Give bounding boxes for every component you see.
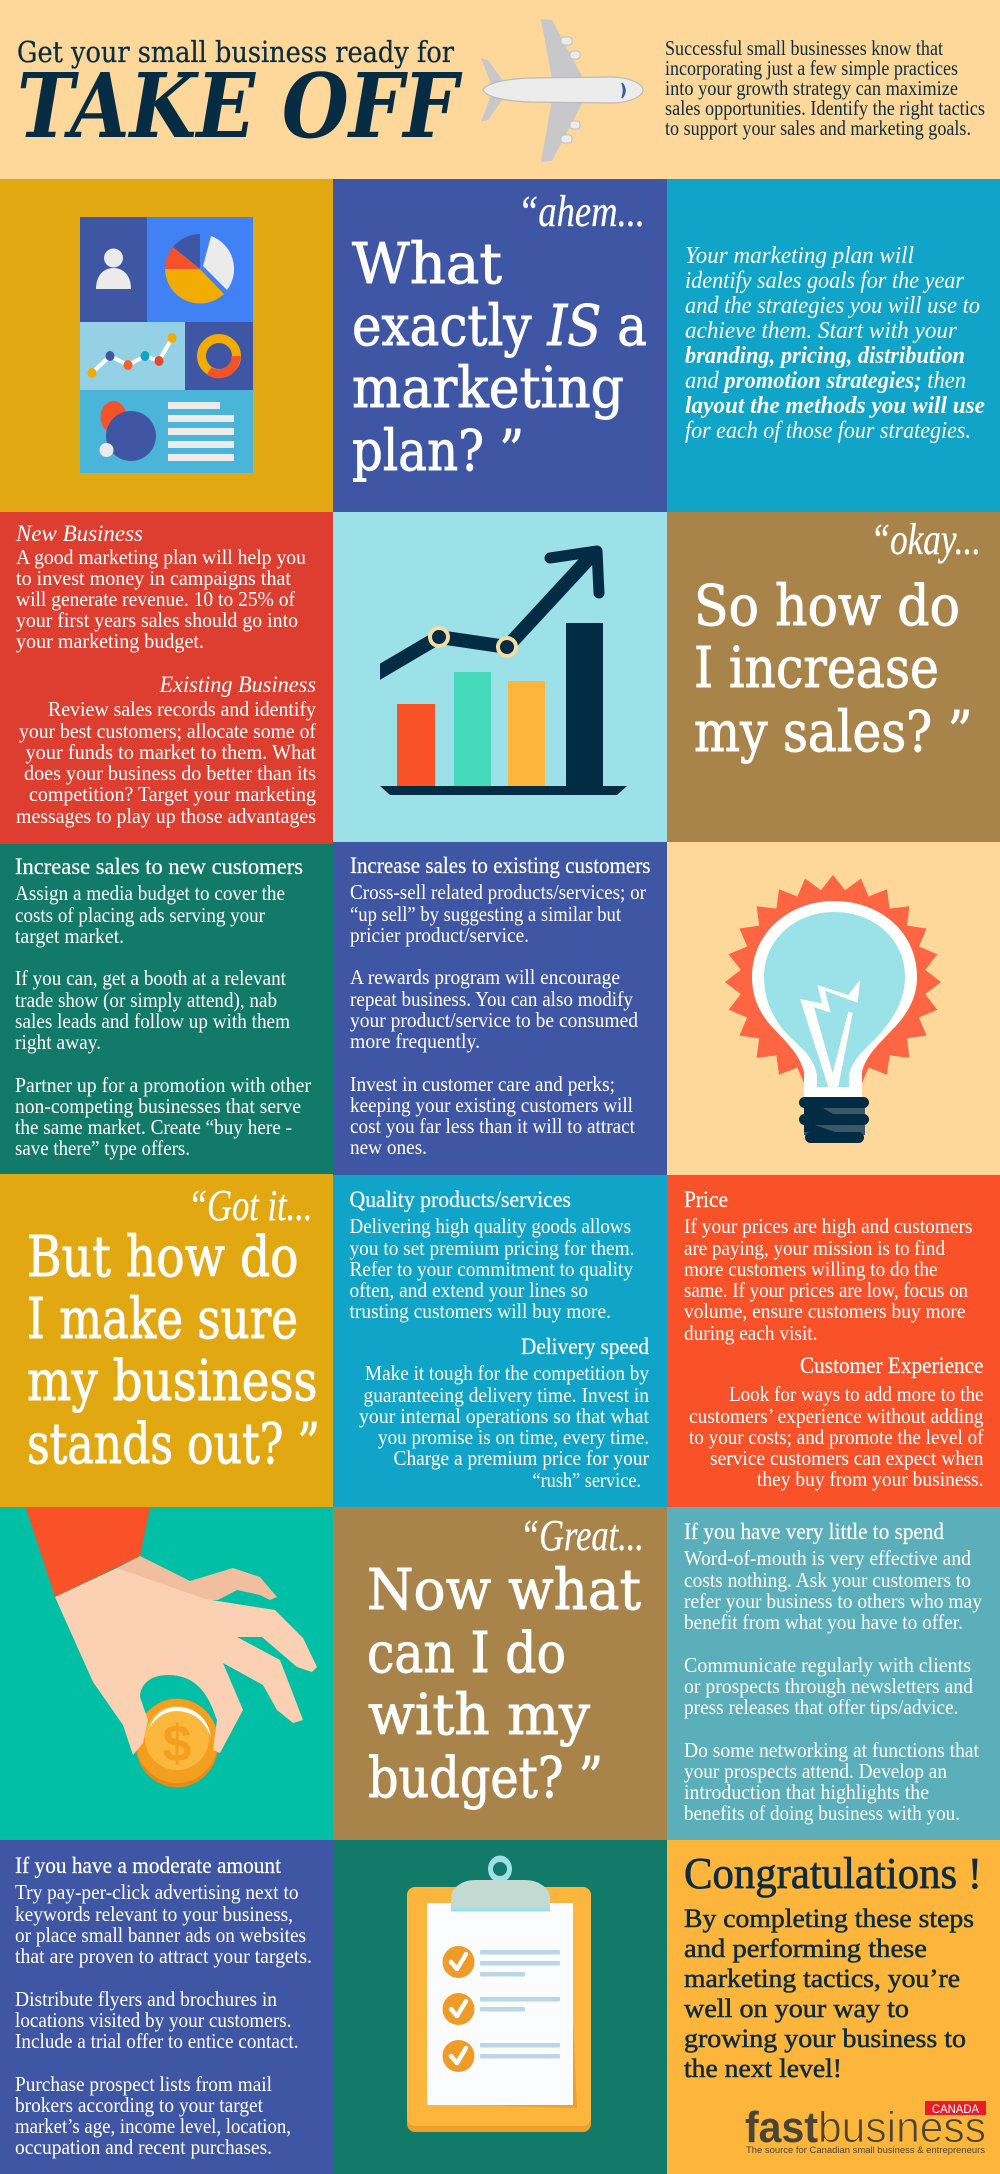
text block: A rewards program will encourage xyxy=(350,965,620,989)
text: customer experience: they buy from your business. xyxy=(757,1467,984,1491)
text: new business: A good marketing plan will help you xyxy=(16,545,306,569)
text block: benefit from what you have to offer. xyxy=(684,1610,963,1634)
text block: trade show (or simply attend), nab xyxy=(15,988,277,1012)
closing message: growing your business to xyxy=(684,2023,966,2053)
text block: market’s age, income level, location, xyxy=(15,2114,291,2138)
panel: sales growth chart xyxy=(333,512,667,842)
text block: Invest in customer care and perks; xyxy=(350,1072,615,1096)
subheading: If you have a moderate amount xyxy=(15,1853,281,1879)
text: price: same. If your prices are low, focus on xyxy=(684,1278,968,1302)
text block: repeat business. You can also modify xyxy=(350,987,633,1011)
panel: moderate amount xyxy=(0,1840,333,2174)
text: delivery speed: Charge a premium price for your xyxy=(394,1446,649,1470)
logo: fast business canada: CANADA xyxy=(932,2102,979,2116)
text block: new ones. xyxy=(350,1135,427,1159)
heading question: my business xyxy=(27,1349,318,1414)
closing message: and performing these xyxy=(684,1933,927,1963)
text block: introduction that highlights the xyxy=(684,1780,929,1804)
text block: sales leads and follow up with them xyxy=(15,1009,290,1033)
heading question: I make sure xyxy=(27,1287,298,1352)
panel: how do I increase my sales xyxy=(667,512,1000,842)
panel: very little to spend xyxy=(667,1507,1000,1840)
heading question: stands out? ” xyxy=(27,1412,320,1477)
intro text: into your growth strategy can maximize xyxy=(665,76,958,100)
subheading: customer experience: Customer Experience xyxy=(800,1353,984,1379)
text: quality: trusting customers will buy more. xyxy=(350,1299,611,1323)
text block: If you can, get a booth at a relevant xyxy=(15,966,286,990)
text block: your product/service to be consumed xyxy=(350,1008,638,1032)
intro text xyxy=(665,36,985,140)
heading question xyxy=(352,232,647,484)
closing message: marketing tactics, you’re xyxy=(684,1963,960,1993)
panel: what exactly is a marketing plan xyxy=(333,179,667,512)
text: price: volume, ensure customers buy more xyxy=(684,1299,966,1323)
panel: how do I stand out xyxy=(0,1174,333,1507)
text block: target market. xyxy=(15,924,124,948)
text block: occupation and recent purchases. xyxy=(15,2135,272,2159)
text: quality: Refer to your commitment to quality xyxy=(350,1257,633,1281)
text: existing business: Review sales records and identify xyxy=(48,697,316,721)
text block: Partner up for a promotion with other xyxy=(15,1073,311,1097)
closing message xyxy=(684,1903,974,2083)
text block: press releases that offer tips/advice. xyxy=(684,1695,958,1719)
body text: and promotion strategies; then xyxy=(685,367,966,394)
text block: Do some networking at functions that xyxy=(684,1738,979,1762)
heading question: But how do xyxy=(27,1225,298,1290)
text: existing business: your best customers; allocate some of xyxy=(19,719,316,743)
title: take off: TAKE OFF xyxy=(17,53,463,158)
text block: or place small banner ads on websites xyxy=(15,1923,306,1947)
text block: Include a trial offer to entice contact. xyxy=(15,2029,298,2053)
heading question: can I do xyxy=(367,1621,566,1686)
body text: Your marketing plan will xyxy=(685,242,914,269)
subheading: Increase sales to new customers xyxy=(15,854,303,880)
text: customer experience: customers’ experience without adding xyxy=(689,1404,984,1428)
subheading: price: Price xyxy=(684,1187,728,1213)
text: quality xyxy=(350,1214,634,1323)
body text: for each of those four strategies. xyxy=(685,417,971,444)
panel: quality and delivery speed xyxy=(333,1175,667,1507)
text block: locations visited by your customers. xyxy=(15,2008,292,2032)
closing message: well on your way to xyxy=(684,1993,909,2023)
quote lead-in: “Got it... xyxy=(188,1181,312,1230)
panel: new and existing business budget xyxy=(0,512,333,844)
logo: fast business canada: business xyxy=(818,2103,986,2152)
text: existing business xyxy=(16,697,316,828)
text block: Purchase prospect lists from mail xyxy=(15,2072,272,2096)
text block: Cross-sell related products/services; or xyxy=(350,880,646,904)
text block: right away. xyxy=(15,1030,101,1054)
heading question: plan? ” xyxy=(352,419,524,484)
closing message: By completing these steps xyxy=(684,1903,974,1933)
heading question: So how do xyxy=(694,574,960,639)
text: price xyxy=(684,1214,972,1345)
text block: costs of placing ads serving your xyxy=(15,903,265,927)
subheading: Increase sales to existing customers xyxy=(350,853,650,879)
panel: increase sales to new customers xyxy=(0,844,333,1174)
text: quality: you to set premium pricing for them. xyxy=(350,1236,634,1260)
text block: or prospects through newsletters and xyxy=(684,1674,973,1698)
icon: airplane xyxy=(481,19,643,162)
text block: refer your business to others who may xyxy=(684,1589,982,1613)
heading question: What xyxy=(352,232,502,297)
text: delivery speed: Make it tough for the competition by xyxy=(365,1361,649,1385)
logo: fast business canada: fast xyxy=(745,2103,818,2152)
text: existing business: messages to play up those advantages xyxy=(16,804,316,828)
body text: and the strategies you will use to xyxy=(685,292,980,319)
text block: Assign a media budget to cover the xyxy=(15,881,285,905)
panel: increase sales to existing customers xyxy=(333,842,667,1175)
logo: fast business canada: The source for Canadian small business & entrepreneurs xyxy=(746,2145,986,2155)
text block xyxy=(350,880,646,1159)
body text: layout the methods you will use xyxy=(685,392,985,419)
heading: congratulations: Congratulations ! xyxy=(684,1849,982,1898)
heading question xyxy=(694,574,972,765)
heading question xyxy=(367,1558,641,1811)
icon: light bulb xyxy=(725,875,941,1143)
text: delivery speed: “rush” service. xyxy=(532,1468,641,1492)
text block: Distribute flyers and brochures in xyxy=(15,1987,277,2011)
text: price: during each visit. xyxy=(684,1321,818,1345)
icon: hand with coin: $ xyxy=(163,1715,192,1773)
text: price: If your prices are high and customers xyxy=(684,1214,972,1238)
text block: Communicate regularly with clients xyxy=(684,1653,971,1677)
text block: Word-of-mouth is very effective and xyxy=(684,1546,971,1570)
subheading: If you have very little to spend xyxy=(684,1519,944,1545)
quote lead-in: “Great... xyxy=(520,1511,644,1560)
panel: header xyxy=(0,0,1000,179)
subheading: quality: Quality products/services xyxy=(350,1187,571,1213)
text: customer experience: service customers can expect when xyxy=(710,1446,984,1470)
panel: congratulations xyxy=(667,1840,1000,2174)
subheading: delivery speed: Delivery speed xyxy=(521,1334,649,1360)
intro text: incorporating just a few simple practices xyxy=(665,56,958,80)
heading question: budget? ” xyxy=(368,1746,603,1811)
text: delivery speed: you promise is on time, every time. xyxy=(378,1425,649,1449)
text block: non-competing businesses that serve xyxy=(15,1094,301,1118)
icon: hand with coin xyxy=(26,1507,317,1788)
text block: Try pay-per-click advertising next to xyxy=(15,1880,298,1904)
heading question: with my xyxy=(368,1683,590,1748)
text block: that are proven to attract your targets. xyxy=(15,1944,312,1968)
text: new business: your marketing budget. xyxy=(16,629,204,653)
text: new business: will generate revenue. 10 to 25% of xyxy=(16,587,295,611)
text: existing business: does your business do better than its xyxy=(24,761,316,785)
text: quality: Delivering high quality goods allows xyxy=(350,1214,631,1238)
body text: identify sales goals for the year xyxy=(685,267,964,294)
panel: what can I do with my budget xyxy=(333,1507,667,1840)
text block xyxy=(15,1880,312,2159)
text block: “up sell” by suggesting a similar but xyxy=(350,902,621,926)
panel: price and customer experience xyxy=(667,1175,1000,1507)
text block: the same market. Create “buy here - xyxy=(15,1115,292,1139)
text: new business: your first years sales should go into xyxy=(16,608,298,632)
heading question xyxy=(27,1225,320,1477)
panel: marketing plan explanation xyxy=(667,179,1000,512)
heading question: marketing xyxy=(352,356,624,421)
text: existing business: competition? Target your marketing xyxy=(29,782,316,806)
heading: get your small business ready for: Get your small business ready for xyxy=(17,35,454,69)
text block: save there” type offers. xyxy=(15,1136,190,1160)
text block: keywords relevant to your business, xyxy=(15,1902,293,1926)
bar chart with trend arrow xyxy=(366,551,627,795)
text block: brokers according to your target xyxy=(15,2093,263,2117)
text: new business: to invest money in campaigns that xyxy=(16,566,291,590)
quote lead-in: “ahem... xyxy=(518,187,645,236)
text block: benefits of doing business with you. xyxy=(684,1801,960,1825)
text block: cost you far less than it will to attract xyxy=(350,1114,635,1138)
logo: fast business canada xyxy=(745,2101,986,2155)
text block xyxy=(15,881,311,1160)
panel: light bulb illustration xyxy=(667,842,1000,1175)
heading question: I increase xyxy=(694,636,939,701)
closing message: the next level! xyxy=(684,2053,842,2083)
text block: pricier product/service. xyxy=(350,923,529,947)
text block: your prospects attend. Develop an xyxy=(684,1759,947,1783)
text: price: more customers willing to do the xyxy=(684,1257,938,1281)
text block: more frequently. xyxy=(350,1029,480,1053)
text: price: are paying, your mission is to find xyxy=(684,1236,945,1260)
body text: branding, pricing, distribution xyxy=(685,342,965,369)
panel: hand holding coin xyxy=(0,1507,333,1840)
heading question: Now what xyxy=(367,1558,641,1623)
text block xyxy=(684,1546,982,1825)
text: quality: often, and extend your lines so xyxy=(350,1278,588,1302)
icon: clipboard checklist xyxy=(407,1856,591,2132)
panel: marketing dashboard illustration xyxy=(0,179,333,512)
heading question: exactly IS a xyxy=(352,294,647,359)
body text: achieve them. Start with your xyxy=(685,317,957,344)
text: delivery speed: guaranteeing delivery time. Invest in xyxy=(364,1383,649,1407)
text: existing business: your funds to market to them. What xyxy=(26,740,316,764)
subheading: new business: New Business xyxy=(15,521,143,546)
body text xyxy=(685,242,985,444)
text block: keeping your existing customers will xyxy=(350,1093,633,1117)
panel: clipboard illustration xyxy=(333,1840,667,2174)
text: delivery speed xyxy=(359,1361,649,1492)
text block: costs nothing. Ask your customers to xyxy=(684,1568,971,1592)
text: delivery speed: your internal operations so that what xyxy=(359,1404,649,1428)
intro text: Successful small businesses know that xyxy=(665,36,943,60)
subheading: existing business: Existing Business xyxy=(159,672,316,697)
text: new business xyxy=(16,545,306,653)
text: customer experience xyxy=(689,1382,984,1491)
icon: dashboard xyxy=(80,217,253,473)
